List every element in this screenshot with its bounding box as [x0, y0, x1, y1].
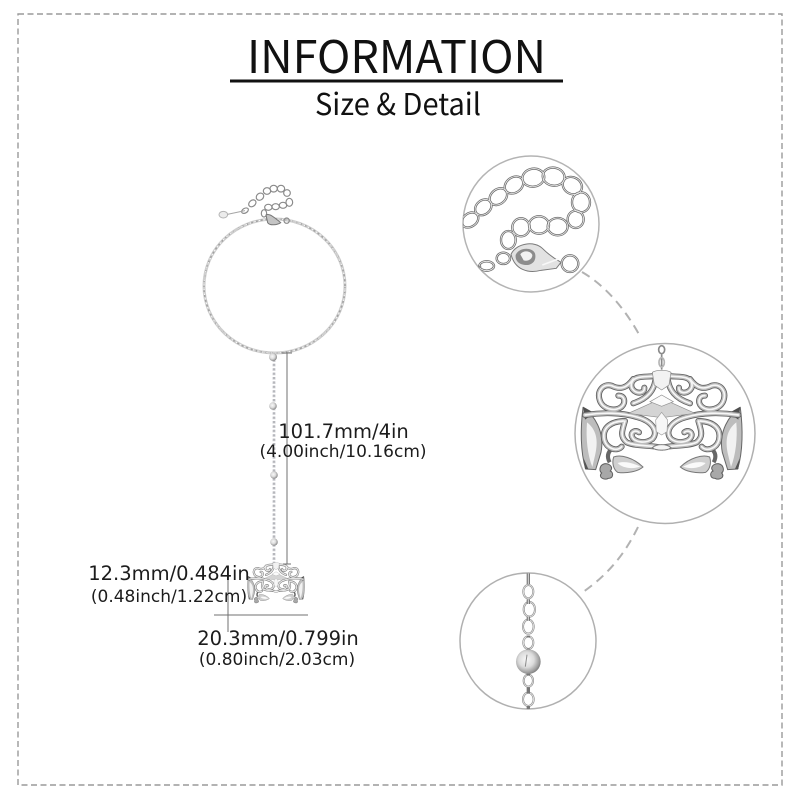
drop chain [272, 355, 276, 565]
small ring [248, 563, 304, 603]
length dimension line [282, 353, 292, 564]
ring enlarged [581, 370, 742, 479]
ring height label: (0.48inch/1.22cm) [91, 587, 247, 607]
bracelet product illustration [204, 185, 345, 603]
ring height label [88, 562, 250, 607]
ring width label: (0.80inch/2.03cm) [199, 650, 355, 670]
connector: ring to bead [583, 527, 638, 592]
enlarged chain and bead [516, 573, 541, 710]
connector: clasp to ring [582, 272, 641, 338]
ring dimension lines [214, 575, 308, 632]
detail circle: clasp [459, 156, 599, 292]
detail circle: bead chain [460, 573, 596, 710]
length label: (4.00inch/10.16cm) [259, 442, 427, 462]
length label [259, 420, 427, 462]
bracelet chain loop [204, 219, 345, 353]
extender chain and clasp [219, 185, 293, 225]
clasp chain links [459, 166, 590, 272]
length label: 101.7mm/4in [278, 420, 409, 443]
title: INFORMATION [247, 21, 546, 86]
title rule [230, 80, 563, 82]
chain beads [269, 353, 278, 546]
ring width label [197, 627, 359, 670]
ring width label: 20.3mm/0.799in [197, 627, 359, 650]
subtitle: Size & Detail [315, 80, 481, 124]
ring height label: 12.3mm/0.484in [88, 562, 250, 585]
ring top chain link [659, 346, 665, 370]
detail circle: ring [575, 344, 755, 524]
